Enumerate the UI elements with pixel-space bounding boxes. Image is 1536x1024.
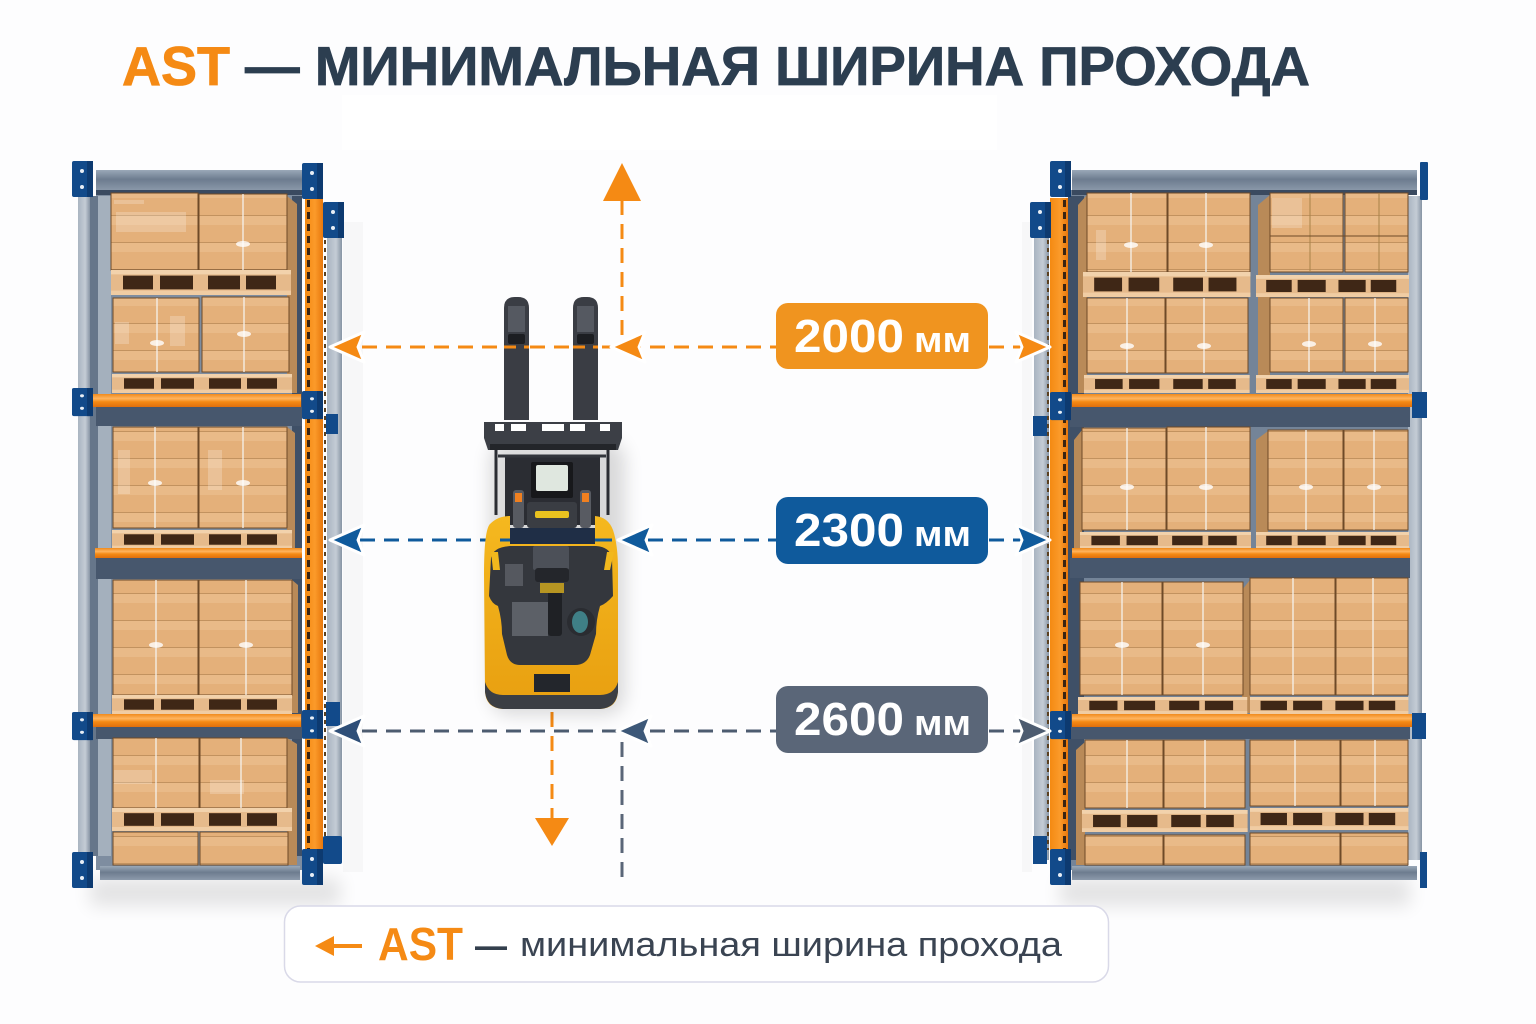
dark cabin xyxy=(489,528,614,665)
display screen xyxy=(536,465,568,491)
arrow: 2000 mm width line xyxy=(330,332,1050,362)
icon: legend arrow xyxy=(315,936,362,956)
label: 2600 mm xyxy=(776,686,988,753)
legend text: — xyxy=(475,925,507,966)
label: 2000 mm xyxy=(776,303,988,369)
forklift shadow xyxy=(490,440,625,715)
left rack pallets and boxes xyxy=(111,193,298,865)
arrow: 2300 mm width line xyxy=(330,525,1050,555)
title: — МИНИМАЛЬНАЯ ШИРИНА ПРОХОДА xyxy=(245,35,1310,97)
control lights xyxy=(513,490,591,528)
panel: left rack xyxy=(72,161,363,906)
icon: forklift top view xyxy=(484,297,652,715)
label: 2000 mm: 2000 xyxy=(794,310,904,362)
right rack blue plates xyxy=(1030,161,1428,888)
left rack orange beams and upright xyxy=(93,198,325,858)
forks xyxy=(504,297,598,420)
label: 2600 mm: 2600 xyxy=(794,693,904,745)
label: 2300 mm: 2300 xyxy=(794,504,904,556)
legend text: минимальная ширина прохода xyxy=(520,926,1062,964)
left rack frame xyxy=(78,170,363,880)
label: 2600 mm: мм xyxy=(914,702,971,743)
right rack orange beams and upright xyxy=(1048,198,1412,858)
yellow body xyxy=(484,516,618,709)
legend xyxy=(284,906,1108,982)
title: AST xyxy=(122,35,230,97)
bumper and vent xyxy=(485,674,618,709)
blue line on shoulders xyxy=(500,538,612,542)
arrow: vertical orange up xyxy=(603,163,641,335)
label: 2300 mm: мм xyxy=(914,513,971,554)
panel: right rack xyxy=(1022,161,1428,906)
mast and carriage xyxy=(484,422,622,525)
orange line over forks xyxy=(504,346,598,348)
arrow head at forklift xyxy=(618,525,652,555)
arrow: 2600 mm width line xyxy=(330,716,1050,746)
rack floor shadow xyxy=(1060,878,1410,906)
label: 2300 mm xyxy=(776,497,988,564)
legend text xyxy=(378,918,1062,970)
left rack blue plates xyxy=(72,161,344,888)
arrow: vertical orange down xyxy=(535,712,569,846)
right rack pallets and boxes xyxy=(1074,193,1409,865)
arrow: vertical grey guide xyxy=(620,742,624,880)
legend text: AST xyxy=(378,918,463,970)
rack floor shadow xyxy=(90,878,340,906)
label: 2000 mm: мм xyxy=(914,319,971,360)
right rack frame xyxy=(1022,170,1422,880)
